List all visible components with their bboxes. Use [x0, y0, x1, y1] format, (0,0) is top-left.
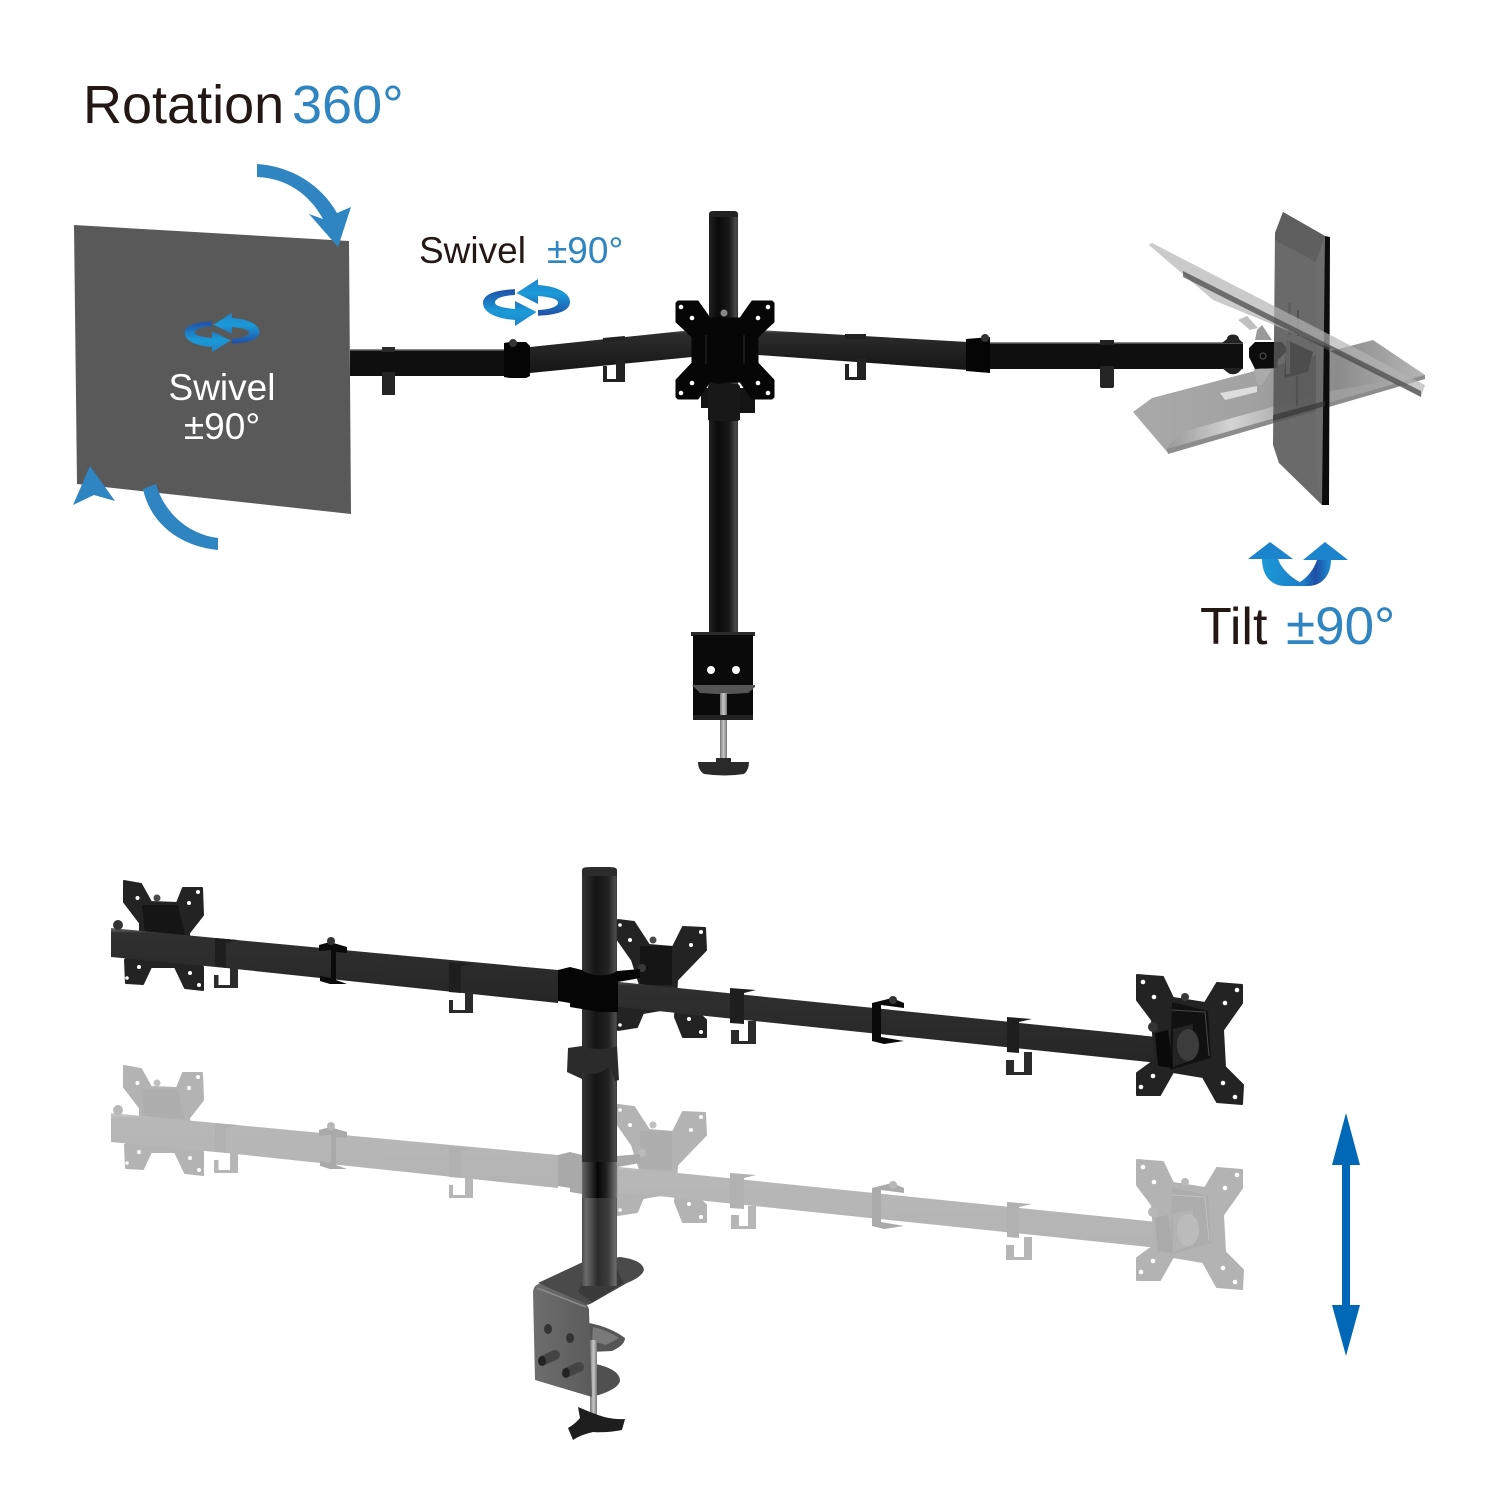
arrow: rotation clockwise top	[257, 164, 351, 247]
arm: top view right segments	[758, 330, 1243, 388]
desk clamp: bottom view rear parts	[538, 1257, 644, 1420]
vertical monitor	[1273, 212, 1325, 505]
VESA plate: top view center	[676, 301, 774, 399]
text: swivel on monitor: Swivel	[169, 367, 275, 408]
icon: tilt arrows	[1248, 542, 1348, 586]
title: rotation 360: 360°	[292, 75, 404, 135]
label: swivel 90: ±90°	[547, 230, 623, 271]
arm assembly: raised position	[111, 881, 1243, 1104]
tilted monitor down	[1133, 340, 1425, 453]
desk clamp: top view	[691, 632, 755, 776]
arm: top view left segments	[350, 330, 692, 395]
pole: bottom view	[578, 867, 624, 1302]
icon: swivel arrows	[483, 279, 570, 326]
center block: arm pivot	[558, 967, 640, 1012]
icon: swivel arrows on monitor	[185, 313, 259, 352]
panel: rotating monitor	[74, 225, 351, 514]
bracket to tilt mount	[1238, 303, 1313, 406]
pole: top view	[701, 211, 755, 633]
text: swivel angle on monitor: ±90°	[184, 406, 260, 447]
monitor tilt group	[1133, 212, 1425, 505]
label: tilt 90: ±90°	[1286, 597, 1395, 656]
knob	[568, 1407, 625, 1440]
ghost arm: lowered position	[111, 1066, 1243, 1289]
arrow: height adjustment	[1332, 1113, 1360, 1356]
desk clamp: bottom view front	[533, 1284, 625, 1440]
label: tilt 90: Tilt	[1200, 598, 1267, 656]
height collar	[567, 1046, 619, 1081]
title: rotation 360: Rotation	[83, 75, 284, 135]
tilted monitor up	[1149, 243, 1425, 397]
label: swivel 90: Swivel	[419, 230, 526, 271]
arrow: rotation bottom	[73, 466, 218, 550]
